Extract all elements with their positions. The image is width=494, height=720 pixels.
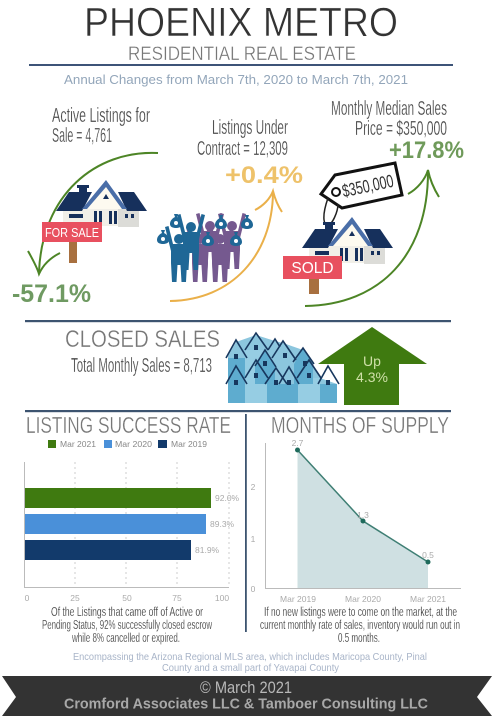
- contract label: [197, 117, 288, 160]
- title: PHOENIX METRO: [84, 0, 398, 45]
- panel: closed sales: [65, 326, 427, 405]
- price label: [331, 98, 447, 140]
- icon: house for sale: [56, 180, 147, 227]
- bar chart: 25: [70, 593, 80, 603]
- legend: [48, 440, 208, 449]
- area line chart: Mar 2021: [410, 594, 446, 604]
- icon: house cluster: [226, 333, 339, 403]
- listing success heading: LISTING SUCCESS RATE: [26, 412, 231, 438]
- area line chart: 1.3: [357, 510, 369, 520]
- icon: sold house: [302, 217, 393, 264]
- closed sales change: 4.3%: [356, 369, 388, 385]
- area line chart: 0: [251, 584, 256, 594]
- active listings change: -57.1%: [12, 280, 91, 308]
- closed sales heading: CLOSED SALES: [65, 326, 220, 353]
- panel: months of supply: [251, 412, 461, 645]
- arrow: orange up: [170, 191, 282, 301]
- subtitle: RESIDENTIAL REAL ESTATE: [128, 44, 356, 65]
- panel: listing success rate: [24, 412, 240, 645]
- months of supply caption: 0.5 months.: [338, 630, 380, 645]
- icon: for sale sign: [42, 222, 102, 263]
- arrow: green up: [305, 170, 439, 306]
- coverage note: County and a small part of Yavapai County: [162, 662, 340, 674]
- area line chart: 2: [251, 482, 256, 492]
- closed sales total: Total Monthly Sales = 8,713: [71, 355, 212, 377]
- footer banner: [2, 676, 492, 716]
- icon: for sale sign: FOR SALE: [45, 226, 99, 240]
- coverage note: [73, 651, 427, 674]
- icon: up arrow: [318, 327, 427, 405]
- area line chart: Mar 2020: [345, 594, 381, 604]
- active listings label: [52, 105, 150, 147]
- months of supply caption: [260, 604, 460, 645]
- active listings label: Active Listings for: [52, 105, 150, 127]
- area line chart: Mar 2019: [280, 594, 316, 604]
- listing success caption: [42, 604, 212, 645]
- icon: sold sign: [283, 256, 342, 294]
- credits: Cromford Associates LLC & Tamboer Consulting LLC: [64, 696, 428, 712]
- bar chart: 92.0%: [215, 493, 240, 503]
- legend: Mar 2021: [60, 440, 97, 449]
- listing success caption: while 8% cancelled or expired.: [71, 630, 180, 645]
- panel: listings under contract: [157, 117, 303, 301]
- area line chart: 0.5: [422, 550, 434, 560]
- listing success caption: Pending Status, 92% successfully closed escrow: [42, 617, 212, 632]
- panel: median price: [283, 98, 464, 306]
- contract change: +0.4%: [225, 162, 303, 189]
- icon: price tag: $350,000: [340, 171, 395, 201]
- date range: Annual Changes from March 7th, 2020 to March 7th, 2021: [64, 73, 408, 87]
- listing success caption: Of the Listings that came off of Active or: [51, 604, 203, 619]
- bar chart: 75: [172, 593, 182, 603]
- contract label: Contract = 12,309: [197, 138, 288, 160]
- bar chart: [24, 462, 240, 603]
- bar chart: 89.3%: [210, 519, 235, 529]
- active listings label: Sale = 4,761: [52, 125, 112, 147]
- closed sales change: Up: [363, 353, 381, 369]
- icon: people with money bags: [157, 213, 253, 282]
- area line chart: 2.7: [292, 438, 304, 448]
- area line chart: 1: [251, 534, 256, 544]
- copyright: © March 2021: [200, 679, 292, 697]
- bar chart: 100: [215, 593, 229, 603]
- legend: Mar 2020: [115, 440, 153, 449]
- coverage note: Encompassing the Arizona Regional MLS area, which includes Maricopa County, Pinal: [73, 651, 427, 663]
- icon: price tag: [321, 163, 402, 225]
- closed sales change: [356, 353, 388, 385]
- price change: +17.8%: [389, 137, 464, 164]
- arrow: green down: [28, 153, 158, 274]
- bar chart: 50: [122, 593, 132, 603]
- area line chart: [251, 438, 461, 604]
- bar chart: 0: [25, 593, 30, 603]
- legend: Mar 2019: [171, 440, 208, 449]
- panel: active listings: [12, 105, 158, 308]
- bar chart: 81.9%: [195, 545, 220, 555]
- contract label: Listings Under: [212, 117, 288, 139]
- icon: sold sign: SOLD: [291, 260, 334, 277]
